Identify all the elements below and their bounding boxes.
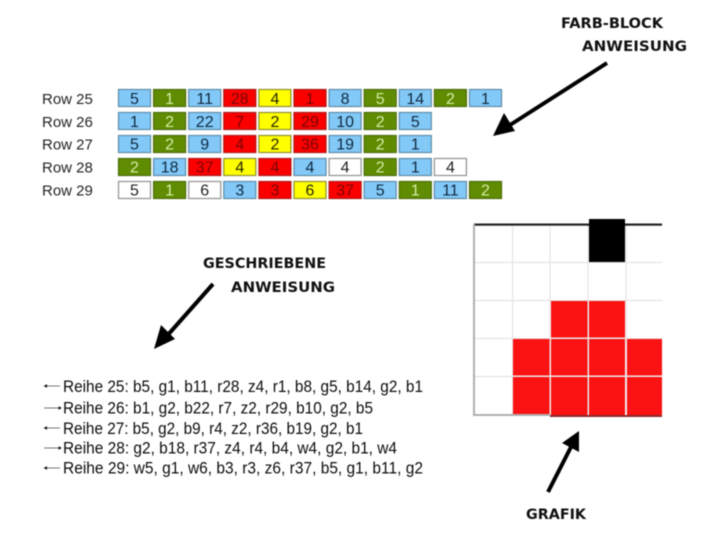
row 29: 6 — [200, 182, 209, 200]
row 29: 3 — [270, 182, 279, 200]
row 29: 1 — [411, 182, 420, 200]
row 26: 2 — [376, 114, 385, 131]
label: Grafik: GRAFIK — [526, 507, 587, 523]
row 25: 14 — [406, 91, 424, 108]
row 29: 2 — [481, 182, 490, 200]
row 25: 5 — [130, 91, 139, 108]
red cells — [513, 301, 662, 415]
row 26: 5 — [411, 114, 420, 131]
line: row 29: Reihe 29: w5, g1, w6, b3, r3, z6, r37, b5, g1, b11, g2 — [63, 460, 423, 478]
heading: Geschriebene Anweisung: ANWEISUNG — [231, 280, 335, 296]
row 27: 9 — [200, 136, 209, 154]
row 29: 6 — [306, 182, 315, 200]
row 26: 2 — [270, 114, 279, 131]
row 27: 4 — [235, 136, 244, 154]
row 25: 28 — [231, 91, 249, 108]
row 25: 1 — [481, 91, 490, 108]
row 25: 2 — [446, 91, 455, 108]
heading: Geschriebene Anweisung: GESCHRIEBENE — [203, 256, 326, 272]
row 29 — [42, 182, 502, 200]
row 29: Row 29 — [42, 182, 93, 200]
line: row 27: Reihe 27: b5, g2, b9, r4, z2, r36, b19, g2, b1 — [63, 420, 363, 438]
black cell — [589, 219, 625, 262]
heading: Geschriebene Anweisung — [203, 256, 335, 296]
row 28: 4 — [446, 160, 455, 176]
row 25 — [42, 90, 502, 108]
row 27 — [42, 136, 431, 154]
row 27: Row 27 — [42, 136, 93, 154]
row 28: 4 — [306, 160, 315, 176]
row 26: 2 — [165, 114, 174, 131]
row 27: 2 — [165, 136, 174, 154]
row 27: 36 — [301, 136, 319, 154]
colour block chart — [42, 90, 502, 200]
row 29: 5 — [130, 182, 139, 200]
heading: Farb-Block Anweisung: FARB-BLOCK — [561, 16, 664, 32]
heading: Farb-Block Anweisung: ANWEISUNG — [582, 39, 687, 55]
row 29: 3 — [235, 182, 244, 200]
row 28: 37 — [196, 160, 214, 176]
row 25: 1 — [306, 91, 315, 108]
row 25: 5 — [376, 91, 385, 108]
left and bottom border — [474, 224, 550, 415]
row 25: 8 — [341, 91, 350, 108]
row 26: 10 — [336, 114, 354, 131]
row 25: 11 — [196, 91, 213, 108]
row 28: 18 — [161, 160, 179, 176]
arrow: to written instructions — [154, 284, 213, 349]
row 25: 1 — [165, 91, 174, 108]
row 26 — [42, 112, 431, 131]
row 29: 11 — [442, 182, 459, 200]
grid lines — [474, 224, 662, 414]
row 26: 1 — [130, 114, 139, 131]
row 29: 1 — [165, 182, 174, 200]
arrow: to colour block chart — [493, 63, 607, 136]
row 27: 5 — [130, 136, 139, 154]
row 25: Row 25 — [42, 91, 93, 108]
row 26: 29 — [301, 114, 319, 131]
row 28 — [42, 158, 466, 176]
row 28: 4 — [235, 160, 244, 176]
row 25: 4 — [270, 91, 279, 108]
row 26: Row 26 — [42, 114, 93, 131]
top border — [474, 224, 662, 226]
written instructions — [44, 378, 423, 478]
row 28: 4 — [341, 160, 350, 176]
heading: Farb-Block Anweisung — [561, 16, 687, 55]
row 28: 2 — [376, 160, 385, 176]
row 29: 5 — [376, 182, 385, 200]
row 28: Row 28 — [42, 160, 93, 176]
row 26: 7 — [235, 114, 244, 131]
line: row 28: Reihe 28: g2, b18, r37, z4, r4, b4, w4, g2, b1, w4 — [63, 440, 397, 458]
line: row 26: Reihe 26: b1, g2, b22, r7, z2, r29, b10, g2, b5 — [63, 400, 373, 418]
row 27: 2 — [376, 136, 385, 154]
pixel graphic — [474, 219, 662, 417]
bottom dark edge — [550, 415, 662, 417]
row 29: 37 — [336, 182, 354, 200]
row 26: 22 — [196, 114, 214, 131]
row 28: 4 — [270, 160, 279, 176]
row 28: 1 — [411, 160, 420, 176]
arrow: to graphic — [548, 431, 579, 492]
row 27: 19 — [336, 136, 354, 154]
row 28: 2 — [130, 160, 139, 176]
row 27: 1 — [411, 136, 420, 154]
row 27: 2 — [270, 136, 279, 154]
line: row 25: Reihe 25: b5, g1, b11, r28, z4, r1, b8, g5, b14, g2, b1 — [63, 378, 423, 396]
